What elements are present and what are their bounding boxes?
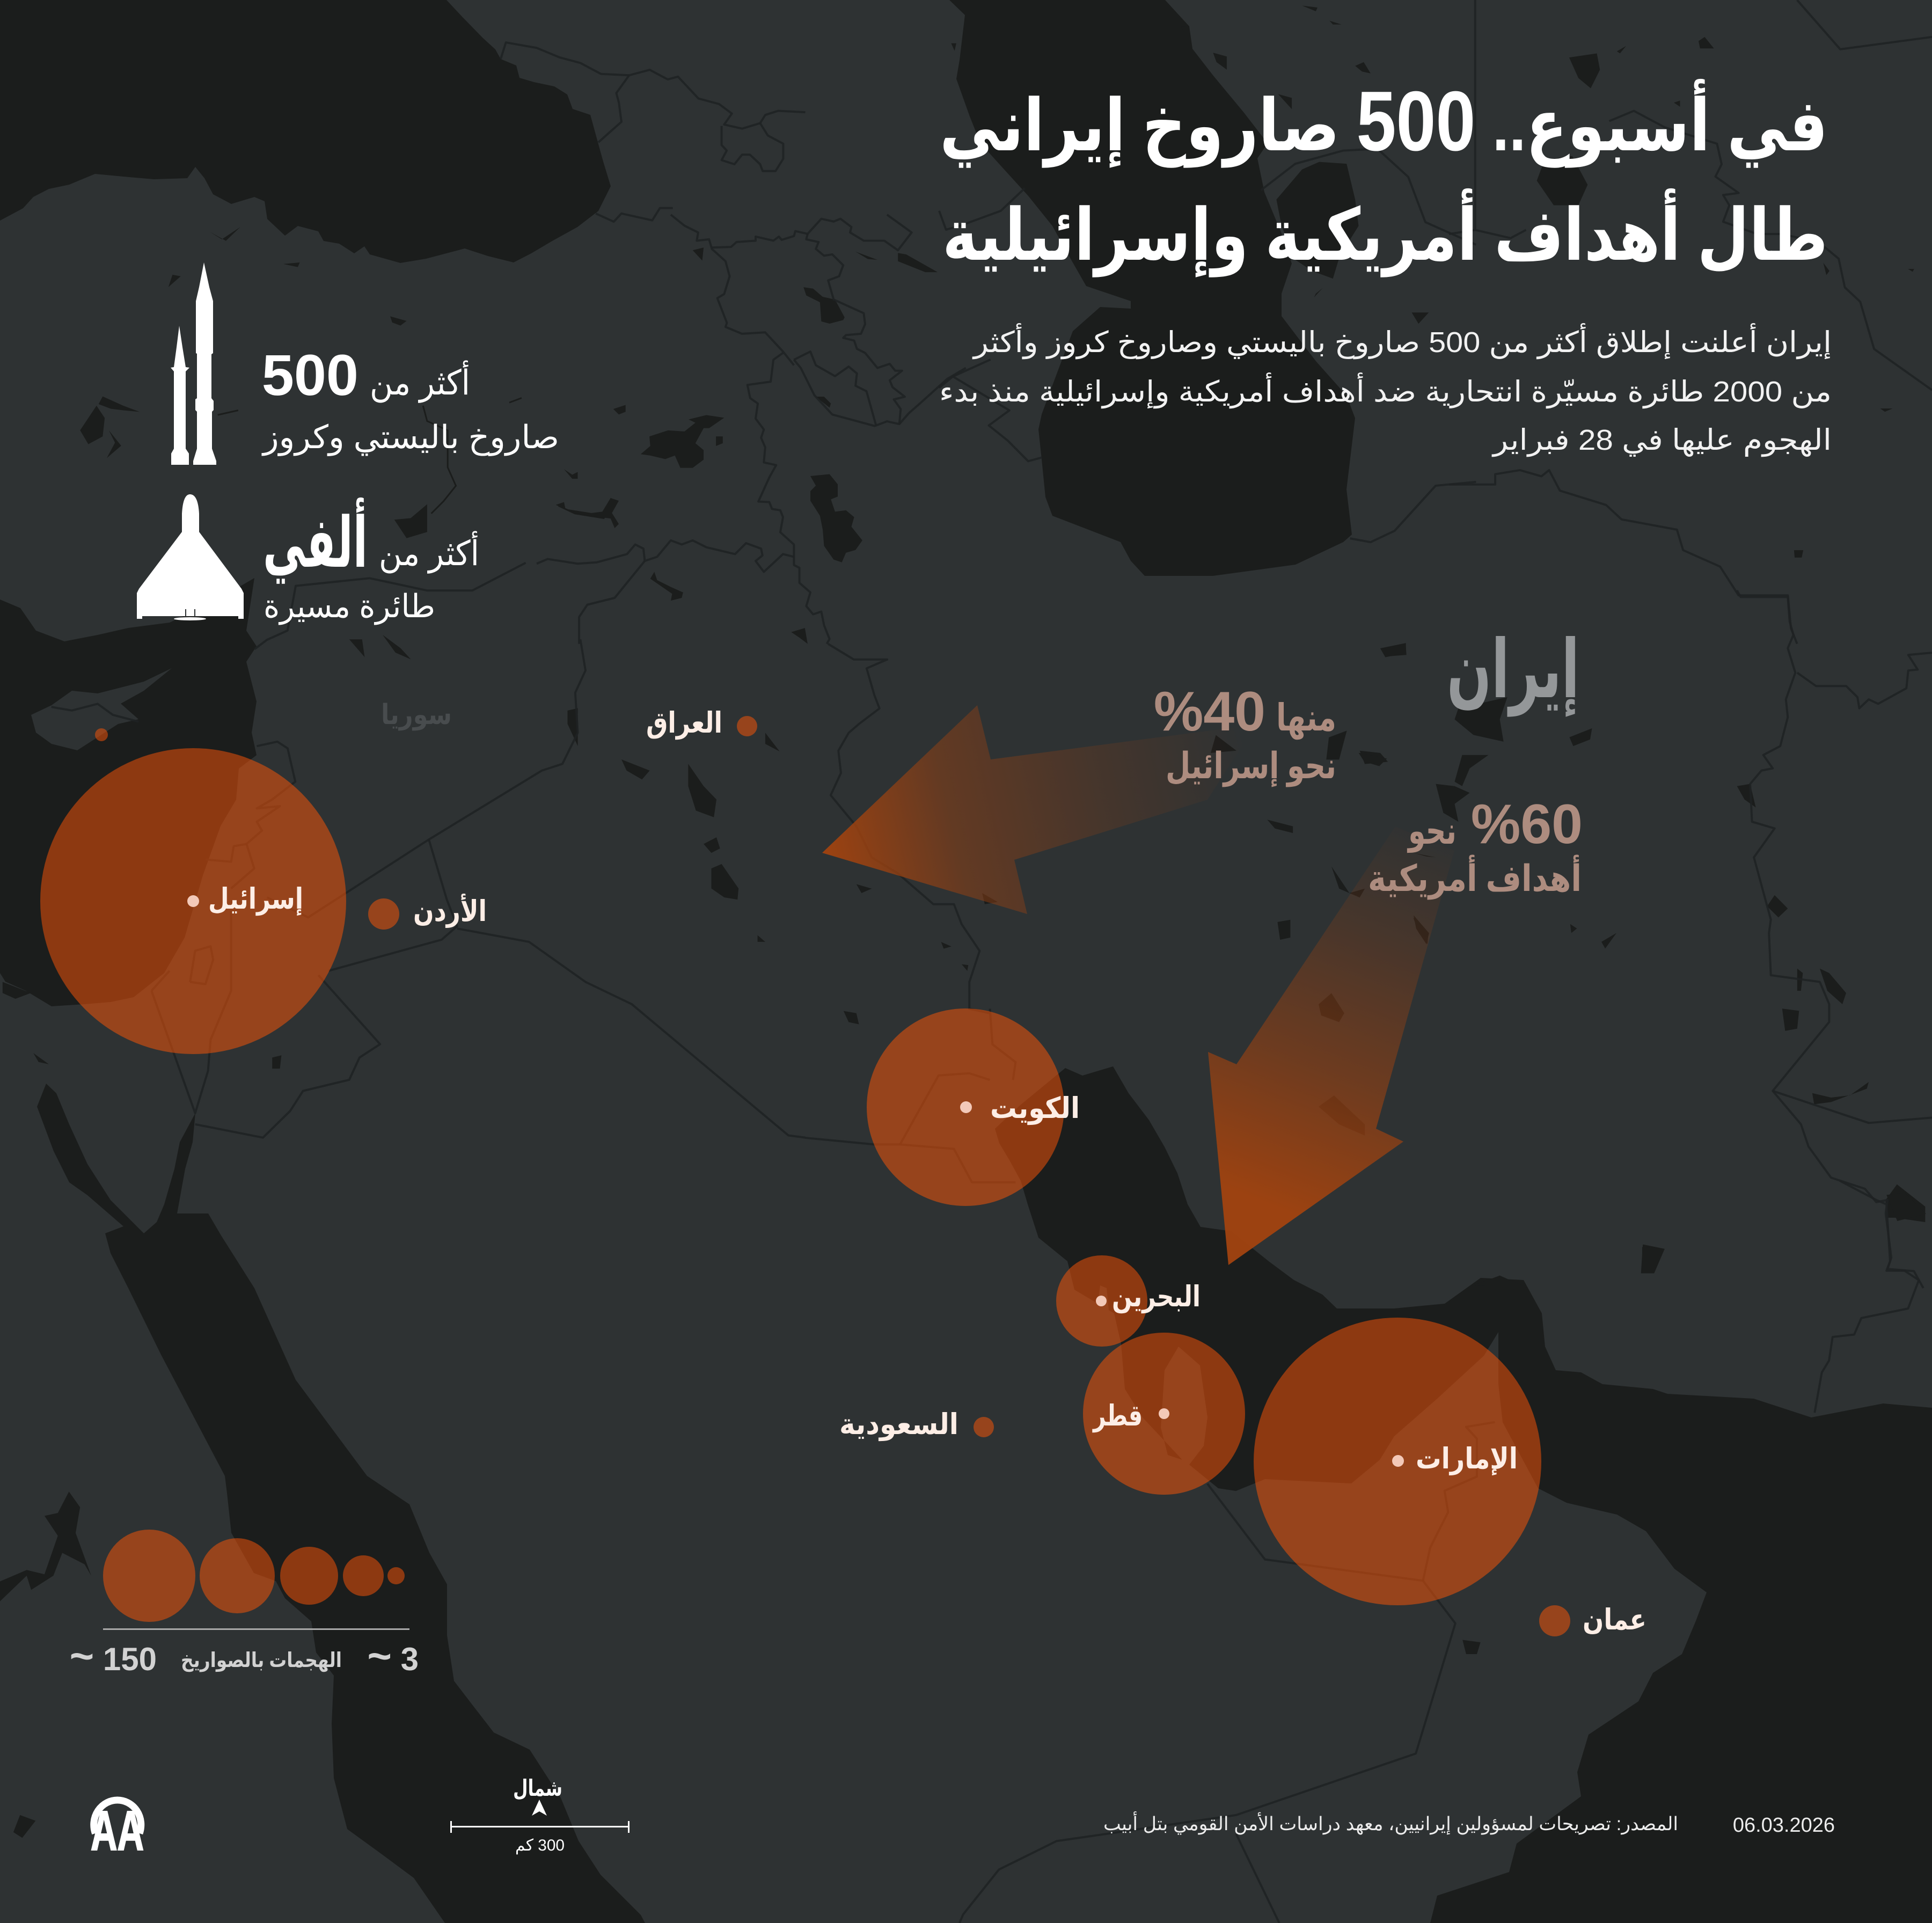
stat: missiles: 500 bbox=[262, 342, 358, 407]
scale bar bbox=[450, 1821, 630, 1855]
country labels: قطر bbox=[1092, 1400, 1143, 1432]
water: Black Sea bbox=[0, 0, 611, 263]
title bbox=[940, 74, 1828, 277]
legend: attack size scale: الهجمات بالصواريخ bbox=[181, 1649, 342, 1672]
circle: Cyprus bbox=[95, 728, 108, 741]
callout: 40 percent to Israel: منها bbox=[1276, 697, 1336, 740]
circle: UAE bbox=[1254, 1318, 1541, 1605]
intro paragraph bbox=[939, 323, 1832, 457]
intro paragraph: الهجوم عليها في 28 فبراير bbox=[1491, 424, 1832, 457]
lakes: Van, Urmia, Sevan bbox=[556, 247, 938, 644]
legend: attack size scale: ~ 150 bbox=[70, 1632, 157, 1679]
island: Bahrain bbox=[1098, 1285, 1109, 1314]
country labels: الكويت bbox=[990, 1092, 1080, 1125]
circle: Israel bbox=[40, 748, 346, 1054]
water: Caspian Sea bbox=[949, 0, 1355, 576]
stat: drones: طائرة مسيرة bbox=[264, 588, 435, 625]
lakes west bbox=[80, 227, 616, 538]
circle: Saudi Arabia bbox=[974, 1417, 994, 1437]
icon: drone bbox=[137, 494, 244, 620]
intro paragraph: من 2000 طائرة مسيّرة انتحارية ضد أهداف أمريكية وإسرائيلية منذ بدء bbox=[939, 372, 1832, 408]
arrow: toward American targets bbox=[1208, 827, 1454, 1265]
country labels: إسرائيل bbox=[208, 883, 303, 916]
legend: attack size scale bbox=[70, 1530, 419, 1679]
logo: AA: AA bbox=[91, 1800, 144, 1862]
stat: missiles bbox=[261, 342, 559, 456]
title: في أسبوع.. 500 صاروخ إيراني bbox=[940, 74, 1828, 169]
stat: drones: ألفي bbox=[263, 497, 368, 584]
island: Cyprus bbox=[31, 668, 172, 750]
logo: AA bbox=[91, 1800, 144, 1862]
callout: 60 percent to American targets bbox=[1368, 793, 1583, 900]
circle: Jordan bbox=[368, 898, 399, 930]
callout: 60 percent to American targets: %60 bbox=[1471, 793, 1583, 856]
stat: missiles: أكثر من bbox=[370, 360, 470, 403]
country labels: العراق bbox=[646, 707, 722, 740]
callout: 40 percent to Israel bbox=[1154, 681, 1336, 787]
callout: 60 percent to American targets: نحو bbox=[1407, 810, 1457, 853]
stat: drones bbox=[263, 497, 479, 625]
callout: 60 percent to American targets: أهداف أمريكية bbox=[1368, 854, 1582, 900]
country labels: البحرين bbox=[1112, 1281, 1201, 1313]
water: Persian Gulf and Arabian Sea bbox=[995, 1066, 1932, 1923]
stat: drones: أكثر من bbox=[379, 531, 479, 574]
water: Red Sea bbox=[37, 1084, 645, 1923]
circle: Kuwait bbox=[867, 1008, 1064, 1206]
label: Iran: إيران bbox=[1447, 624, 1579, 717]
circle: Qatar bbox=[1083, 1333, 1245, 1495]
circle: Bahrain bbox=[1056, 1255, 1147, 1347]
circle centre dots bbox=[187, 895, 1404, 1467]
scale bar: 300 كم bbox=[515, 1837, 565, 1855]
lakes north of Iran bbox=[951, 6, 1429, 324]
country labels: الأردن bbox=[413, 894, 487, 928]
water: Mediterranean Sea bbox=[0, 578, 257, 1006]
callout: 40 percent to Israel: نحو إسرائيل bbox=[1166, 745, 1336, 787]
circle: Iraq bbox=[737, 716, 757, 736]
country labels: الإمارات bbox=[1416, 1443, 1518, 1475]
north arrow: شمال bbox=[513, 1775, 562, 1801]
intro paragraph: إيران أعلنت إطلاق أكثر من 500 صاروخ باليستي وصاروخ كروز وأكثر bbox=[972, 323, 1832, 359]
icon: missiles bbox=[171, 262, 216, 465]
callout: 40 percent to Israel: %40 bbox=[1154, 681, 1265, 743]
attack circles bbox=[40, 716, 1570, 1636]
country labels: سوريا bbox=[381, 699, 452, 731]
country labels: السعودية bbox=[839, 1408, 958, 1441]
country labels bbox=[208, 699, 1646, 1636]
country labels: عمان bbox=[1583, 1604, 1646, 1636]
stat: missiles: صاروخ باليستي وكروز bbox=[261, 419, 559, 456]
arrow: toward Israel bbox=[822, 705, 1256, 914]
north arrow bbox=[513, 1775, 562, 1816]
circle: Oman bbox=[1539, 1605, 1570, 1636]
source: المصدر: تصريحات لمسؤولين إيرانيين، معهد دراسات الأمن القومي بتل أبيب bbox=[1103, 1811, 1678, 1835]
legend: attack size scale: ~ 3 bbox=[367, 1632, 419, 1679]
date: 06.03.2026 bbox=[1733, 1814, 1835, 1837]
